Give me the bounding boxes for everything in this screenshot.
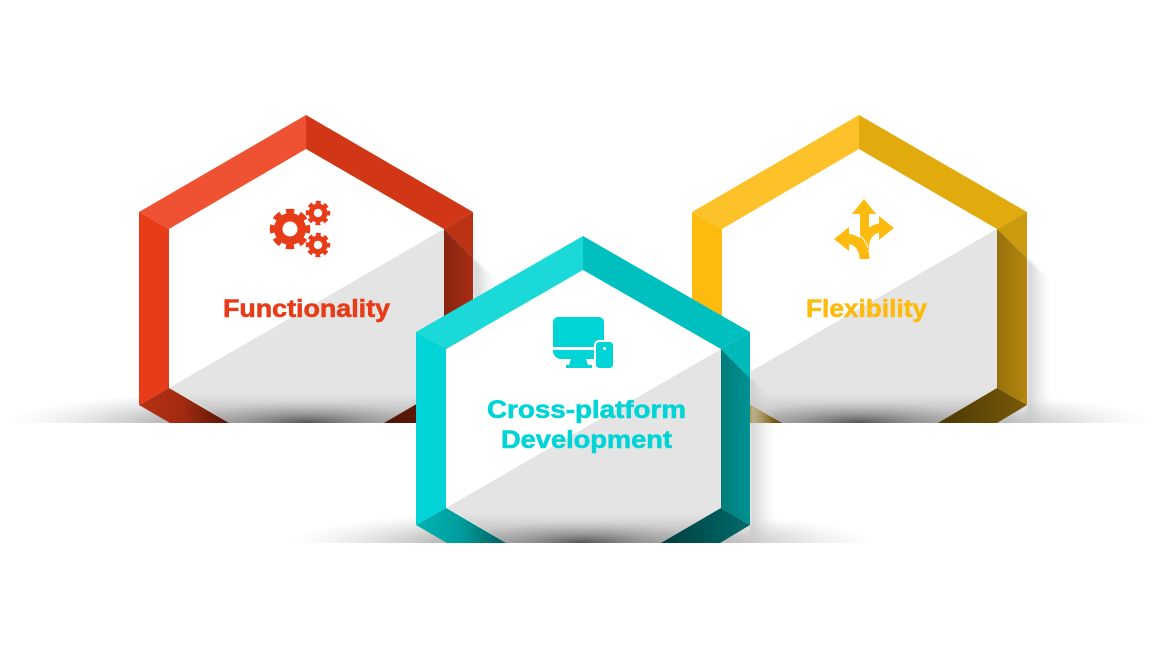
label: Development: Development bbox=[501, 426, 673, 454]
hexagon: Flexibility bbox=[564, 115, 1154, 457]
bevelled frame: Flexibility bbox=[692, 115, 1027, 423]
inner face: Flexibility bbox=[750, 229, 997, 423]
infographic: three hexagons bbox=[40, 115, 1120, 543]
floor shadow: Flexibility bbox=[772, 402, 1120, 423]
icon: branching arrows bbox=[834, 199, 894, 259]
bevelled frame: Cross-platform Development bbox=[416, 236, 750, 543]
long side shadow: Cross-platform Development bbox=[750, 378, 776, 550]
hexagon: Cross-platform Development bbox=[322, 236, 844, 543]
floor shadow: Functionality bbox=[40, 400, 227, 423]
inner face: Cross-platform Development bbox=[446, 324, 721, 543]
inner face: Functionality bbox=[170, 229, 444, 423]
label: Flexibility: Flexibility bbox=[806, 295, 927, 323]
bevelled frame: Functionality bbox=[139, 115, 473, 423]
long side shadow: Flexibility bbox=[1026, 258, 1044, 416]
label: Functionality: Functionality bbox=[223, 295, 390, 323]
hexagon: Functionality bbox=[6, 115, 606, 457]
long side shadow: Functionality bbox=[473, 258, 491, 332]
floor shadow: Cross-platform Development bbox=[322, 520, 844, 543]
label: Cross-platform: Cross-platform bbox=[487, 396, 686, 424]
icon: gears bbox=[272, 202, 328, 256]
icon: desktop and mobile devices bbox=[553, 317, 615, 370]
